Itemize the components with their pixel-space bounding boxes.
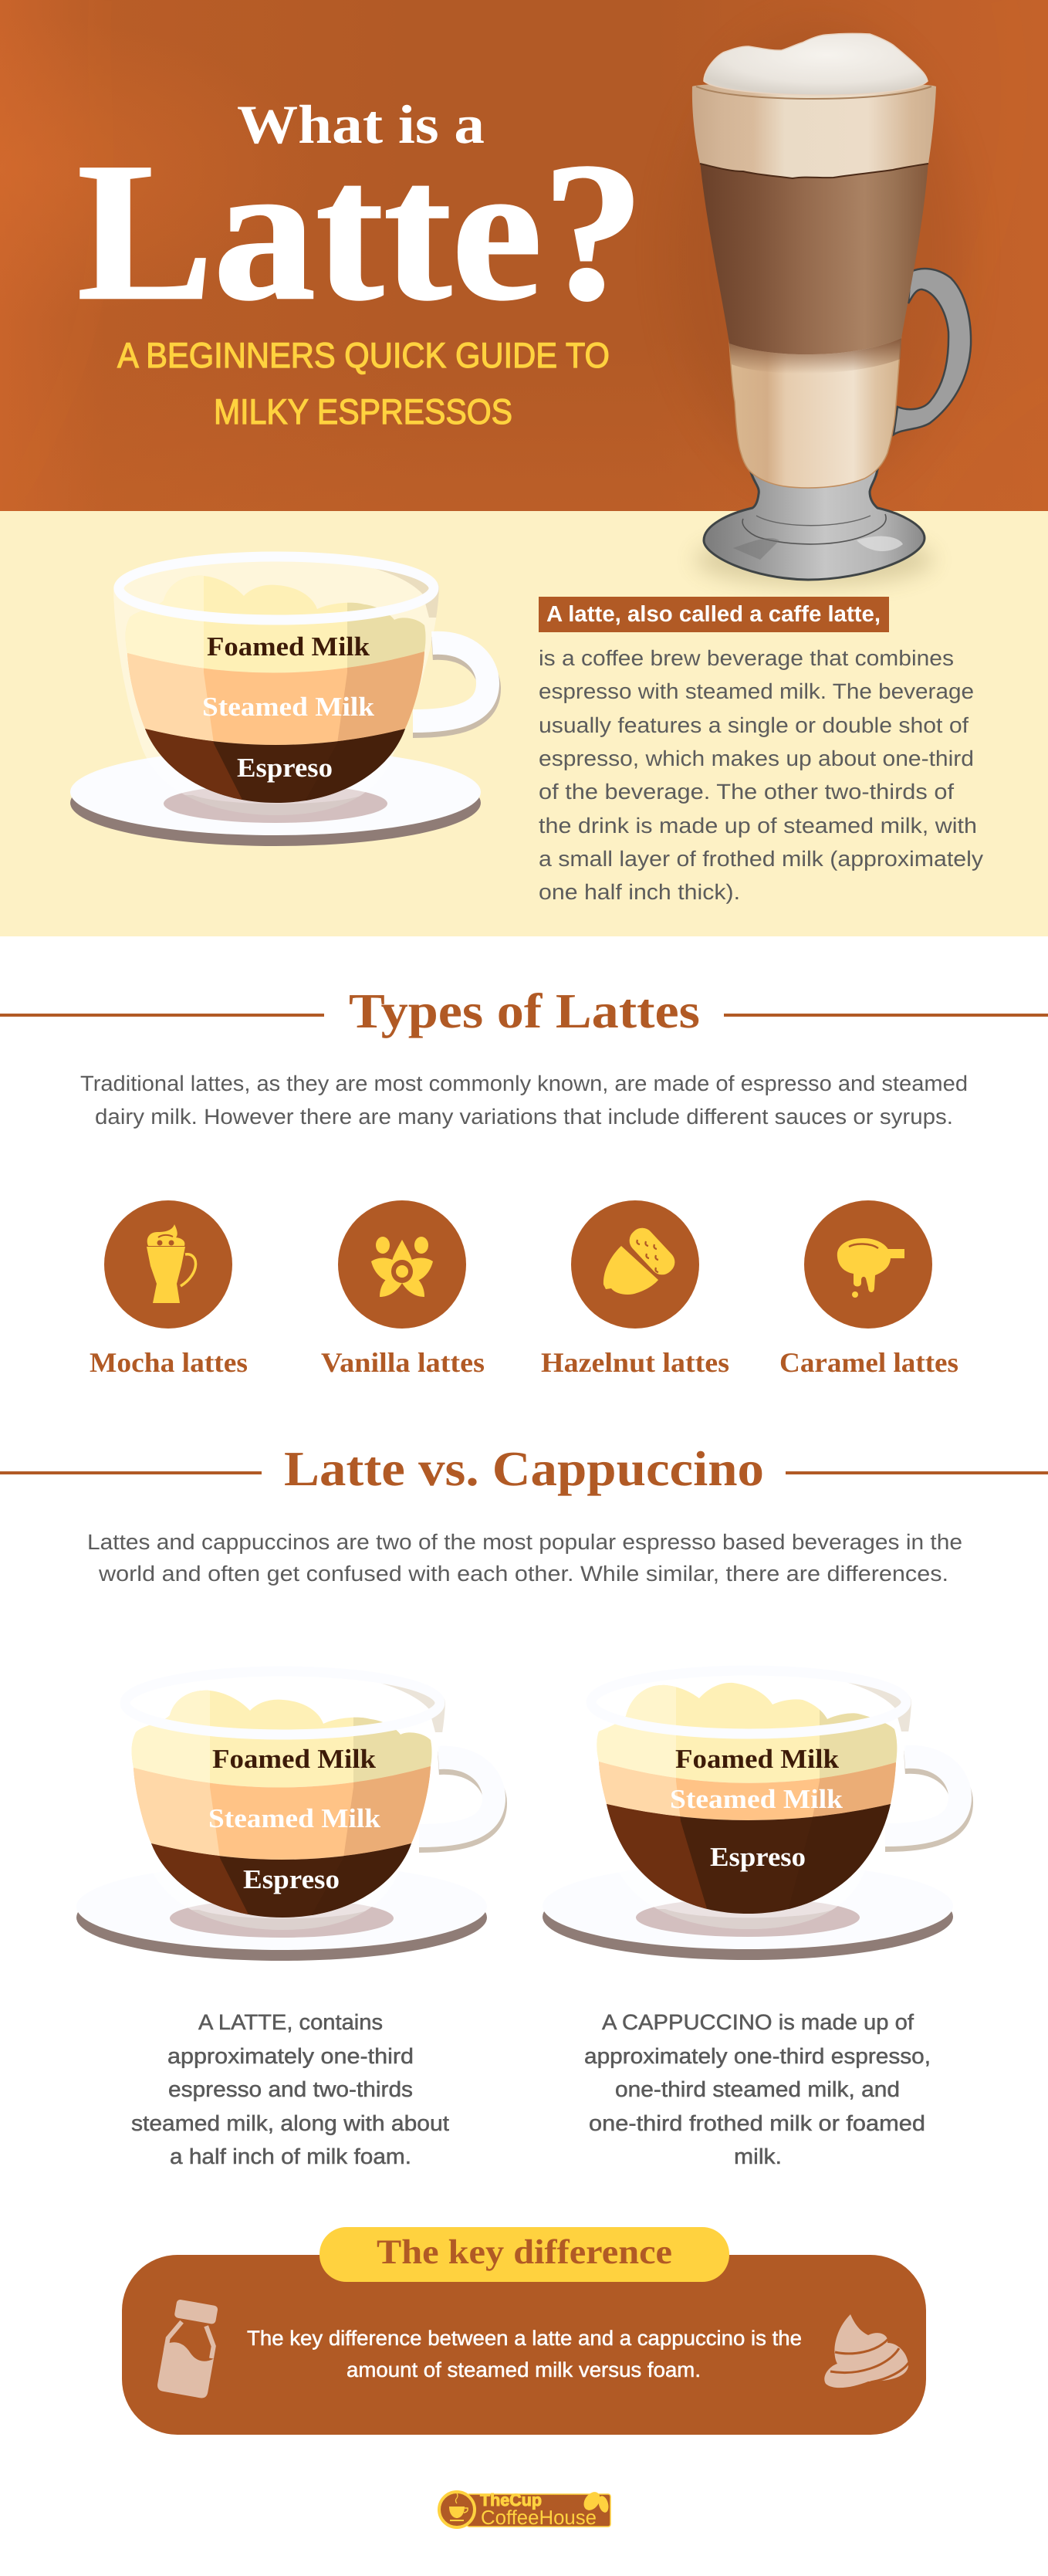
subtitle [117,335,610,432]
text block: a latte: approximately one-third [167,2044,414,2068]
panel: the key difference [122,2227,926,2435]
text: key difference explanation: amount of steamed milk versus foam. [347,2358,701,2381]
glass highlights [162,553,440,817]
text block: latte definition: of the beverage. The other two-thirds of [539,780,954,804]
label: foamed milk: Foamed Milk [212,1744,377,1774]
label: espreso: Espreso [243,1864,340,1894]
text block: comparison intro: Lattes and cappuccinos are two of the most popular espresso based beverages in the [87,1530,962,1554]
icon: milk bottle [157,2298,223,2399]
text block: a cappuccino: A CAPPUCCINO is made up of [602,2010,914,2034]
logo: the cup coffee house: CoffeeHouse [481,2506,597,2529]
icon: hazelnut [571,1200,699,1329]
glass body [113,553,439,815]
heading: latte vs cappuccino [0,1441,1048,1496]
label: caramel lattes: Caramel lattes [779,1347,958,1378]
illustration: latte cup comparison [76,1655,495,1961]
logo: the cup coffee house: TheCup [480,2490,542,2510]
label: espreso: Espreso [237,753,333,783]
text block: latte definition: a small layer of frothed milk (approximately [539,847,983,871]
label: espreso: Espreso [710,1842,806,1872]
badge: the key difference: The key difference [377,2232,672,2271]
icon: mocha latte [104,1200,232,1329]
coffee layer [700,161,928,354]
text block: comparison intro [87,1530,962,1586]
text block: a latte: a half inch of milk foam. [170,2144,411,2168]
panel: cream intro section [0,511,1048,936]
layers [125,576,426,803]
icon: caramel ladle [804,1200,932,1329]
heading: types of lattes: Types of Lattes [349,983,700,1038]
label: mocha lattes: Mocha lattes [90,1347,248,1378]
label: steamed milk: Steamed Milk [208,1803,381,1833]
cup handle [413,643,489,726]
heading: types of lattes [0,983,1048,1038]
label: hazelnut lattes: Hazelnut lattes [541,1347,729,1378]
heading: latte vs cappuccino: Latte vs. Cappuccino [284,1441,764,1496]
logo: the cup coffee house [439,2489,610,2529]
text: key difference explanation: The key difference between a latte and a cappuccino is the [247,2327,802,2350]
illustration: cappuccino cup comparison [543,1654,962,1960]
label: vanilla lattes: Vanilla lattes [321,1347,485,1378]
cream layer [692,83,936,178]
text block: latte definition: one half inch thick). [539,880,740,904]
text block: latte definition: usually features a single or double shot of [539,713,969,737]
saucer [70,749,481,846]
illustration: tall latte glass [692,33,971,586]
text block: a cappuccino: approximately one-third espresso, [584,2044,931,2068]
rim [119,557,434,620]
text: key difference explanation [247,2327,802,2381]
text block: a latte: espresso and two-thirds [168,2077,413,2101]
title: Latte?: Latte? [77,123,644,341]
icon: glass handle [894,269,971,435]
text block: a latte: steamed milk, along with about [131,2111,449,2135]
text block: comparison intro: world and often get confused with each other. While similar, there are differences. [98,1562,948,1586]
text block: latte definition: the drink is made up of steamed milk, with [539,814,977,838]
text block: a cappuccino: milk. [734,2144,782,2168]
text block: latte definition: is a coffee brew beverage that combines [539,646,954,670]
subtitle: MILKY ESPRESSOS [214,391,512,432]
title: What is a: What is a [237,95,485,155]
icon: foam swirl [824,2314,909,2388]
panel: header banner [0,0,1048,511]
text block: latte definition: espresso with steamed milk. The beverage [539,679,974,703]
text block: a cappuccino [584,2010,931,2168]
text block: types intro: dairy milk. However there are many variations that include different sauces or syrups. [95,1105,953,1129]
badge: the key difference [319,2227,729,2282]
highlighted lead: A latte, also called a caffe latte, [546,602,881,627]
subtitle: A BEGINNERS QUICK GUIDE TO [117,335,610,375]
label: steamed milk: Steamed Milk [670,1784,843,1814]
text block: a cappuccino: one-third frothed milk or foamed [589,2111,925,2135]
glass stem and base [704,469,925,580]
foam [704,33,928,95]
text block: a latte: A LATTE, contains [198,2010,383,2034]
text block: latte definition: espresso, which makes up about one-third [539,746,974,770]
highlighted lead [539,597,889,632]
label: foamed milk: Foamed Milk [207,631,370,662]
text block: latte definition [539,597,983,904]
icon: vanilla flower [338,1200,466,1329]
text block: types intro [80,1071,968,1129]
text block: a cappuccino: one-third steamed milk, and [615,2077,900,2101]
label: foamed milk: Foamed Milk [675,1744,840,1774]
illustration: latte cup diagram [70,540,489,846]
text block: a latte [131,2010,449,2168]
milk layer [729,332,901,488]
text block: types intro: Traditional lattes, as they are most commonly known, are made of espresso and steamed [80,1071,968,1095]
label: steamed milk: Steamed Milk [202,692,375,722]
